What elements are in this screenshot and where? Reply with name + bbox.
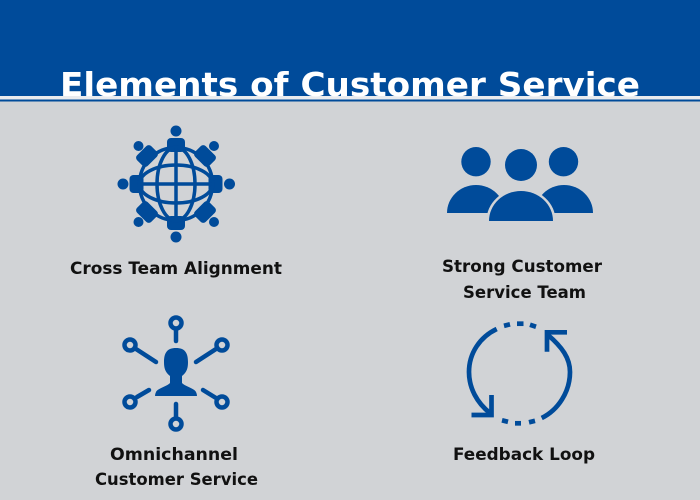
- label: cross team alignment: Cross Team Alignment: [70, 259, 282, 278]
- icon: team of three people: [447, 147, 593, 221]
- label: strong customer service team: Strong Customer: [442, 257, 603, 276]
- label: strong customer service team: Service Team: [463, 283, 586, 302]
- label: feedback loop: Feedback Loop: [453, 445, 595, 464]
- label: omnichannel customer service: Omnichannel: [110, 445, 238, 464]
- icon: globe with people: [118, 126, 235, 242]
- icon: feedback loop arrows: [469, 324, 570, 423]
- header band: [0, 0, 700, 102]
- icon: person with channel nodes: [124, 318, 228, 430]
- label: strong customer service team: [442, 257, 603, 302]
- title: Elements of Customer Service: [60, 65, 640, 104]
- label: omnichannel customer service: Customer Service: [95, 470, 258, 489]
- label: omnichannel customer service: [95, 445, 258, 489]
